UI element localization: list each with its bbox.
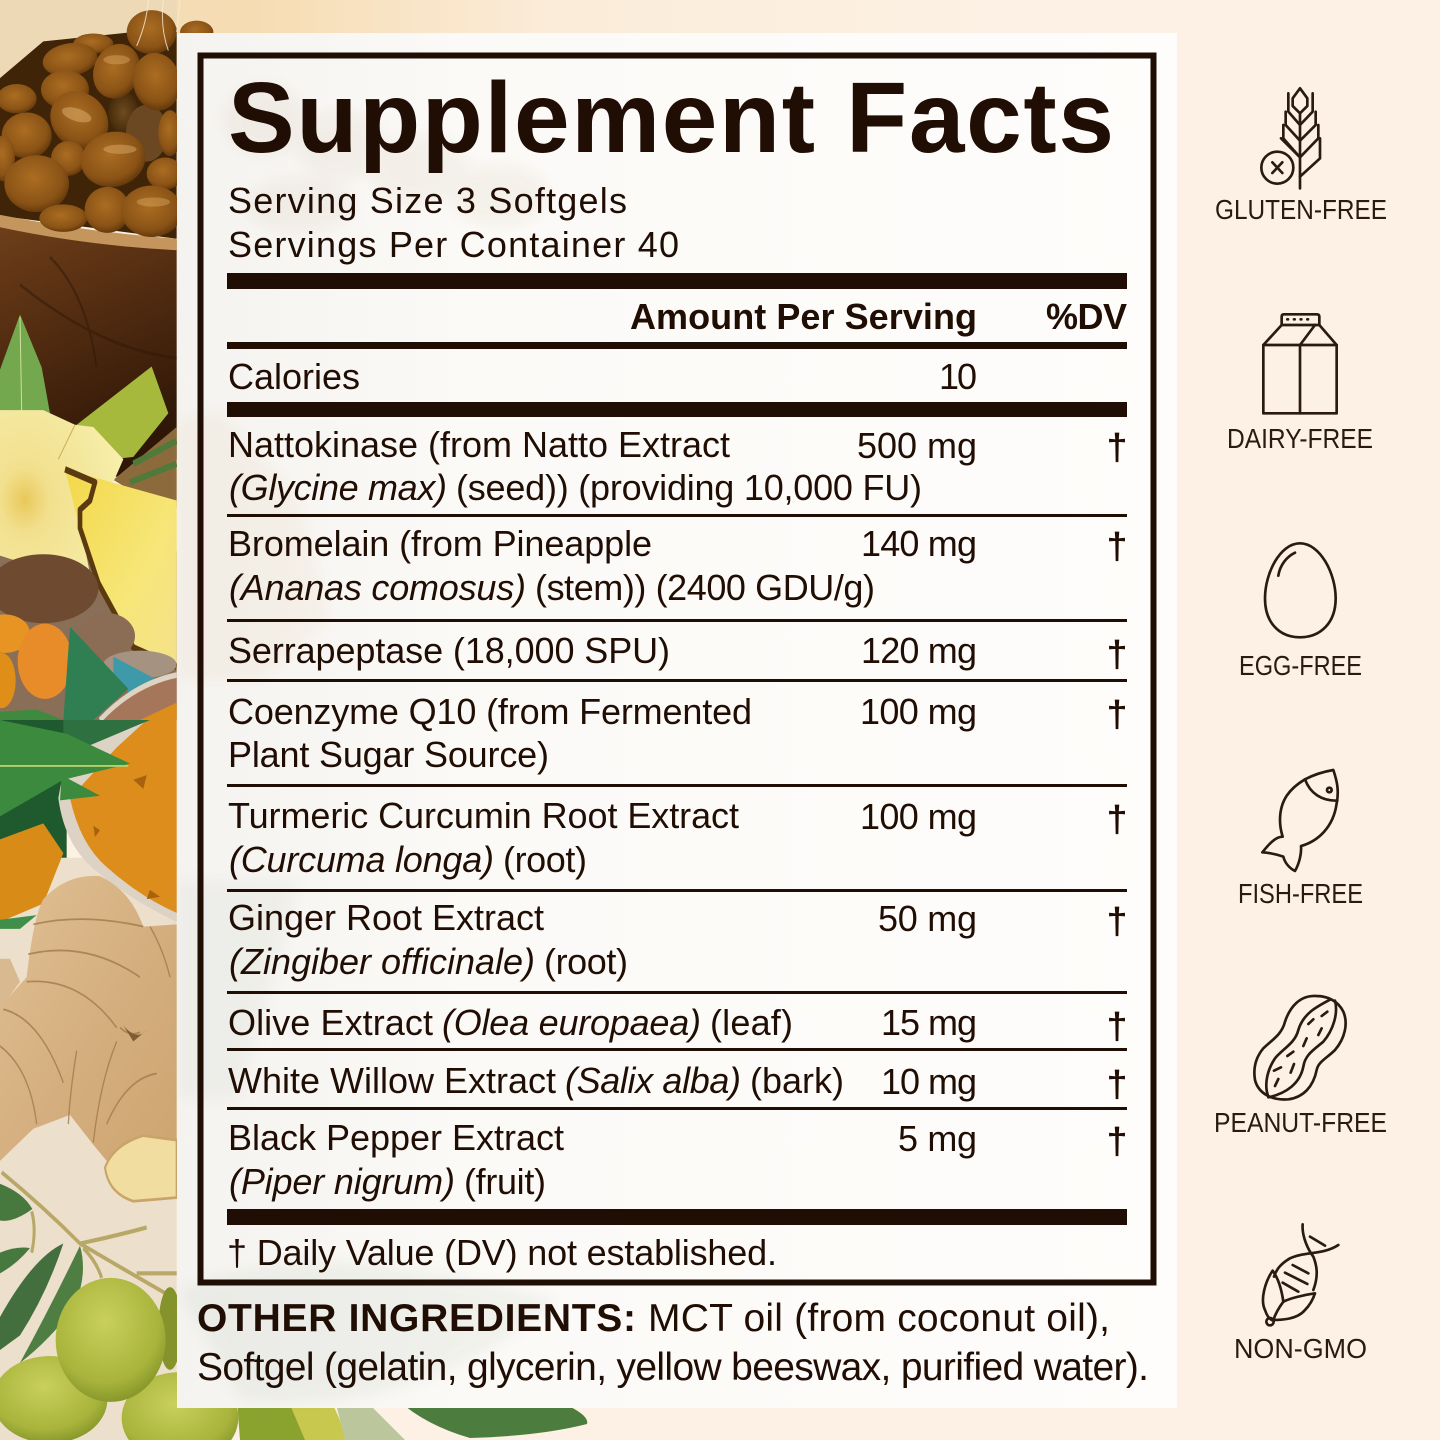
row: coenzyme q10: 100 mg xyxy=(860,691,977,732)
row: serrapeptase: Serrapeptase (18,000 SPU) xyxy=(228,630,670,671)
row: black pepper: (Piper nigrum) xyxy=(229,1161,455,1202)
photo: olive branch and olives xyxy=(0,1172,238,1440)
photo: ginger background and turmeric bowl xyxy=(0,720,177,1440)
row: white willow: White Willow Extract xyxy=(228,1060,556,1101)
row: olive: (leaf) xyxy=(710,1002,793,1043)
row: serrapeptase xyxy=(228,630,1127,674)
photo: bottom leaves and olives below the panel xyxy=(237,1400,587,1440)
row: calories: Calories xyxy=(228,356,360,397)
row: nattokinase: Nattokinase (from Natto Extract xyxy=(228,424,730,465)
table header: Amount Per Serving xyxy=(630,296,977,337)
row: turmeric: † xyxy=(1107,798,1127,839)
row: olive: (Olea europaea) xyxy=(442,1002,701,1043)
icon: gluten-free wheat xyxy=(1261,88,1320,188)
row: olive: † xyxy=(1107,1005,1127,1046)
label: non-gmo: NON-GMO xyxy=(1234,1333,1367,1364)
row: turmeric xyxy=(228,795,1127,880)
row: coenzyme q10: Coenzyme Q10 (from Fermented xyxy=(228,691,752,732)
row: nattokinase: † xyxy=(1107,426,1127,467)
row: black pepper: 5 mg xyxy=(898,1118,977,1159)
row: turmeric: 100 mg xyxy=(860,796,977,837)
row: serrapeptase: 120 mg xyxy=(861,630,977,671)
row: calories: 10 xyxy=(939,356,977,397)
other ingredients: MCT oil (from coconut oil), xyxy=(648,1297,1110,1340)
title: Supplement Facts xyxy=(228,62,1114,174)
row: nattokinase: 500 mg xyxy=(857,425,977,466)
row: olive: 15 mg xyxy=(881,1002,977,1043)
serving information xyxy=(228,180,679,265)
row: turmeric: (root) xyxy=(503,839,587,880)
row: white willow xyxy=(228,1060,1127,1104)
row: ginger: † xyxy=(1107,900,1127,941)
row: nattokinase: (seed)) (providing 10,000 FU) xyxy=(456,467,922,508)
icon: fish-free xyxy=(1262,770,1338,871)
row: coenzyme q10 xyxy=(228,691,1127,775)
row: coenzyme q10: † xyxy=(1107,693,1127,734)
row: ginger: Ginger Root Extract xyxy=(228,897,544,938)
row: nattokinase xyxy=(228,424,1127,508)
serving information: Serving Size 3 Softgels xyxy=(228,180,627,221)
rule bars and row dividers xyxy=(227,273,1127,1225)
footnote: † Daily Value (DV) not established. xyxy=(227,1232,777,1273)
panel: supplement facts box border xyxy=(200,56,1154,1282)
photo: ginger root xyxy=(0,876,177,1201)
row: bromelain: † xyxy=(1107,525,1127,566)
row: ginger: 50 mg xyxy=(878,898,977,939)
row: white willow: (bark) xyxy=(750,1060,844,1101)
row: black pepper xyxy=(228,1117,1127,1202)
label: egg-free: EGG-FREE xyxy=(1239,650,1362,681)
photo: pineapple and leaves xyxy=(0,315,177,721)
photo: natto beans in wooden bowl xyxy=(0,0,213,478)
label: peanut-free: PEANUT-FREE xyxy=(1214,1107,1387,1138)
ghost food behind the label xyxy=(177,84,560,1403)
panel: translucent white card xyxy=(177,33,1177,1408)
row: olive xyxy=(228,1002,1127,1046)
row: black pepper: Black Pepper Extract xyxy=(228,1117,564,1158)
row: ginger xyxy=(228,897,1127,982)
row: bromelain: (stem)) (2400 GDU/g) xyxy=(535,567,875,608)
row: white willow: † xyxy=(1107,1063,1127,1104)
row: ginger: (root) xyxy=(544,941,628,982)
other ingredients: OTHER INGREDIENTS: xyxy=(197,1297,636,1340)
label: gluten-free: GLUTEN-FREE xyxy=(1215,194,1387,225)
icon: egg-free xyxy=(1265,543,1336,637)
row: olive: Olive Extract xyxy=(228,1002,433,1043)
other ingredients: Softgel (gelatin, glycerin, yellow beeswax, purified water). xyxy=(197,1346,1149,1389)
row: turmeric: Turmeric Curcumin Root Extract xyxy=(228,795,739,836)
row: white willow: (Salix alba) xyxy=(565,1060,741,1101)
row: bromelain xyxy=(228,523,1127,608)
row: calories xyxy=(228,356,977,397)
row: bromelain: (Ananas comosus) xyxy=(229,567,526,608)
row: white willow: 10 mg xyxy=(881,1061,977,1102)
table header xyxy=(630,296,1127,337)
row: serrapeptase: † xyxy=(1107,633,1127,674)
row: nattokinase: (Glycine max) xyxy=(229,467,447,508)
table header: %DV xyxy=(1046,296,1127,337)
row: black pepper: (fruit) xyxy=(464,1161,546,1202)
label: dairy-free: DAIRY-FREE xyxy=(1227,423,1373,454)
icon: dairy-free milk carton xyxy=(1263,314,1337,413)
row: coenzyme q10: Plant Sugar Source) xyxy=(228,734,549,775)
row: bromelain: 140 mg xyxy=(861,523,977,564)
serving information: Servings Per Container 40 xyxy=(228,224,679,265)
icon: non-gmo dna seed xyxy=(1263,1224,1338,1325)
icon: peanut-free xyxy=(1254,996,1346,1099)
row: ginger: (Zingiber officinale) xyxy=(229,941,535,982)
other ingredients xyxy=(197,1297,1149,1389)
label: fish-free: FISH-FREE xyxy=(1238,878,1363,909)
row: bromelain: Bromelain (from Pineapple xyxy=(228,523,652,564)
row: turmeric: (Curcuma longa) xyxy=(229,839,494,880)
row: black pepper: † xyxy=(1107,1120,1127,1161)
